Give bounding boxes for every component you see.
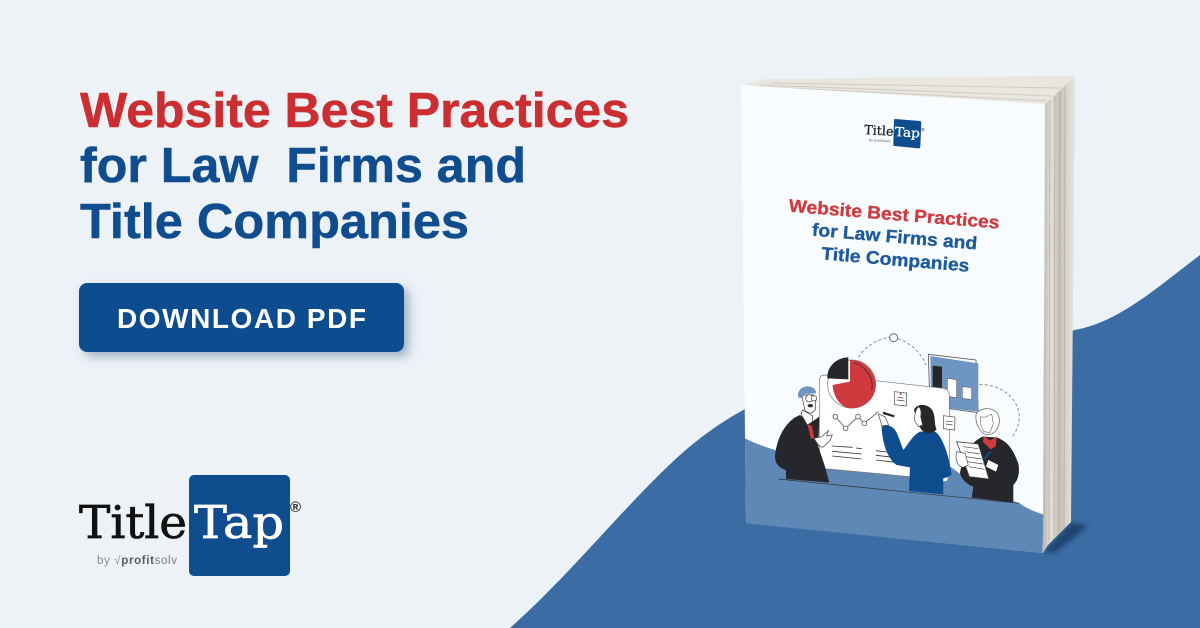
bar chart panel [928, 354, 978, 413]
logo: TitleTap [79, 475, 301, 576]
book [741, 76, 1088, 553]
woman with clipboard [956, 409, 1019, 503]
book shadow [1043, 522, 1088, 553]
heading: Title Companies [80, 195, 469, 249]
ground line [778, 479, 1019, 503]
button: download PDF [79, 283, 404, 352]
blue wave shape [510, 255, 1200, 628]
line chart [833, 412, 878, 431]
cover title: for Law Firms and [811, 220, 978, 253]
cover logo: ® [921, 126, 925, 132]
heading: for Law Firms and [80, 139, 526, 193]
logo: TitleTap: Tap [194, 496, 284, 549]
cover logo: Title [864, 122, 894, 139]
cover title: Website Best Practices [788, 196, 1000, 233]
logo: TitleTap: ® [290, 499, 301, 516]
heading: Website Best Practices [80, 84, 629, 138]
sticky notes [894, 392, 955, 430]
whiteboard text lines [832, 446, 898, 463]
logo: TitleTap: Title [79, 496, 187, 549]
cover illustration [775, 334, 1019, 503]
cover logo: by profitsolv [869, 138, 891, 143]
cover title [788, 196, 1000, 276]
button: download PDF: DOWNLOAD PDF [117, 303, 366, 334]
page block: right edge [1043, 76, 1075, 553]
woman drawing on board [878, 405, 952, 494]
man presenter [775, 386, 832, 483]
pie chart [827, 357, 876, 408]
front cover [741, 85, 1045, 553]
cover logo [864, 119, 925, 148]
heading [80, 84, 629, 249]
page block: top edge [741, 76, 1075, 104]
whiteboard [819, 375, 949, 477]
cover title: Title Companies [821, 243, 970, 276]
cover logo: Tap [894, 124, 920, 141]
cover lower blue band [745, 438, 1043, 553]
dashed connector arcs [858, 337, 1019, 438]
logo: TitleTap: by √profitsolv [97, 554, 177, 567]
